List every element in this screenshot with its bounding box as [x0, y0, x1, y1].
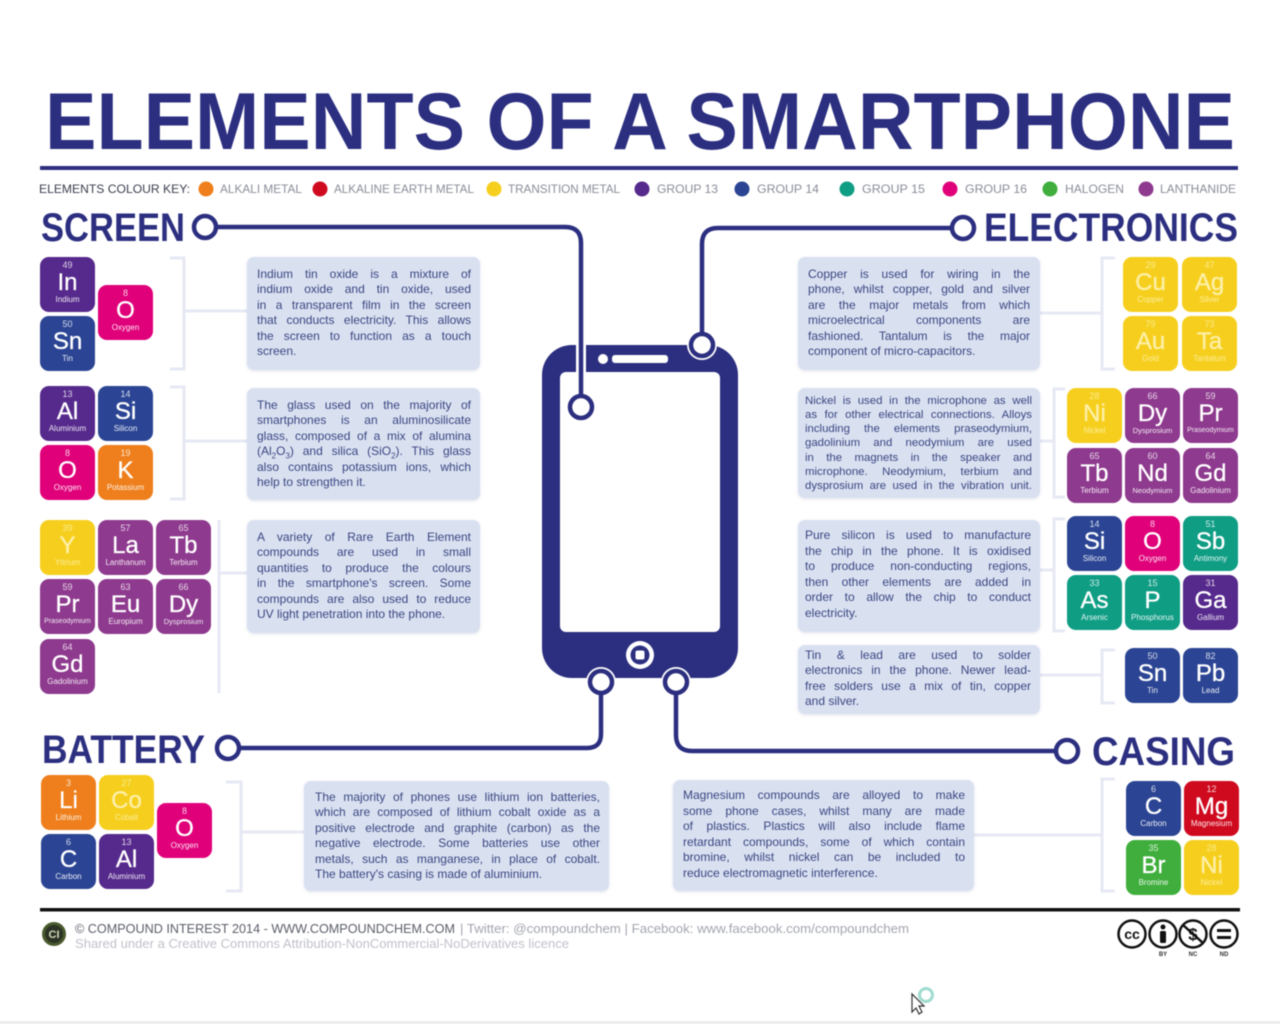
tiles: screen group 3: Gadolinium — [47, 677, 88, 686]
tiles: casing: Magnesium — [1191, 819, 1232, 828]
tiles: electronics group 1: Ag — [1195, 269, 1224, 296]
tiles: battery — [40, 774, 213, 890]
tiles: screen group 3: La — [112, 532, 139, 559]
tiles: electronics group 3: P — [1144, 587, 1160, 614]
tiles: screen group 1: 8 — [123, 288, 128, 298]
tiles: electronics group 3: O — [1143, 528, 1162, 555]
tiles: electronics group 1: Cu — [1135, 269, 1166, 296]
tiles: screen group 1: 50 — [62, 319, 72, 329]
tiles: electronics group 3: Sb — [1196, 528, 1225, 555]
text: tin and lead: Tin & lead are used to solder — [805, 648, 1031, 662]
text: silicon: order to allow the chip to conduct — [805, 590, 1031, 604]
text: casing: bromine, whilst nickel can be included to — [683, 850, 965, 864]
text: nickel: in the magnets in the speaker and — [805, 452, 1032, 464]
tiles: screen group 1: Oxygen — [112, 323, 139, 332]
footer credits: Shared under a Creative Commons Attribution-NonCommercial-NoDerivatives licence — [75, 937, 569, 951]
tiles: casing: 35 — [1148, 843, 1158, 853]
tiles: electronics group 4: 82 — [1205, 651, 1216, 661]
phone — [542, 345, 738, 678]
tiles: electronics group 4 — [1124, 647, 1239, 704]
colour key legend — [39, 182, 1236, 196]
creative commons icons: cc — [1124, 926, 1140, 942]
tiles: electronics group 3: Phosphorus — [1131, 613, 1174, 622]
tiles: casing: Carbon — [1140, 819, 1167, 828]
text: indium tin oxide — [247, 257, 480, 370]
heading: casing: CASING — [1092, 730, 1235, 774]
title: ELEMENTS OF A SMARTPHONE — [45, 77, 1235, 167]
text: glass: help to strengthen it. — [257, 475, 366, 489]
tiles: electronics group 3: Antimony — [1194, 554, 1227, 563]
text: copper: component of micro-capacitors. — [808, 344, 975, 358]
tiles: electronics group 4: Sn — [1138, 660, 1167, 687]
line and node: electronics — [687, 217, 974, 360]
tiles: battery: Co — [111, 787, 142, 814]
tiles: electronics group 2: Praseodymium — [1187, 427, 1234, 434]
tiles: battery: Oxygen — [171, 841, 198, 850]
tiles: screen group 2: Si — [115, 398, 136, 425]
tiles: electronics group 1: Gold — [1142, 354, 1159, 363]
tiles: casing: Mg — [1195, 793, 1228, 820]
tiles: screen group 2: K — [117, 457, 134, 484]
tiles: battery: Carbon — [55, 872, 82, 881]
text: nickel — [798, 388, 1040, 498]
tiles: screen group 2: Oxygen — [54, 483, 81, 492]
text: battery: metals, such as manganese, in place of cobalt. — [315, 852, 600, 866]
colour key legend: ALKALI METAL — [220, 182, 302, 196]
text: glass: also contains potassium ions, which — [257, 460, 471, 474]
colour key legend: ELEMENTS COLOUR KEY: — [39, 182, 190, 196]
tiles: electronics group 2: 64 — [1205, 451, 1216, 461]
tiles: screen group 3: 65 — [178, 523, 188, 533]
tiles: battery: 3 — [66, 778, 71, 788]
text: tin and lead: electronics in the phone. Newer lead- — [805, 663, 1031, 677]
tiles: electronics group 3: 15 — [1147, 578, 1158, 588]
tiles: screen group 1: In — [57, 269, 78, 296]
heading: screen: SCREEN — [41, 206, 185, 250]
tiles: screen group 3: Tb — [169, 532, 198, 559]
text: silicon: electricity. — [805, 606, 857, 620]
tiles: electronics group 3: Arsenic — [1081, 613, 1108, 622]
mouse cursor — [912, 988, 932, 1014]
tiles: screen group 3: 59 — [62, 582, 72, 592]
text: silicon: Pure silicon is used to manufacture — [805, 528, 1031, 542]
text: rare earth: A variety of Rare Earth Element — [257, 530, 471, 544]
tiles: screen group 3: Terbium — [169, 558, 198, 567]
heading: electronics: ELECTRONICS — [984, 206, 1238, 250]
text: casing: reduce electromagnetic interference. — [683, 866, 878, 880]
tiles: battery: Li — [59, 787, 78, 814]
text: rare earth: quantities to produce the colours — [257, 560, 471, 574]
tiles: electronics group 2: Dy — [1138, 400, 1167, 427]
tiles: electronics group 1: Tantalum — [1193, 354, 1226, 363]
tiles: electronics group 3: Ga — [1194, 587, 1226, 614]
creative commons icons: $ — [1188, 925, 1198, 944]
text: glass: smartphones is an aluminosilicate — [257, 413, 471, 427]
text: tin and lead — [798, 645, 1040, 714]
tiles: screen group 1 — [39, 256, 154, 372]
footer rule — [40, 908, 1240, 912]
colour key legend: HALOGEN — [1065, 182, 1124, 196]
text: copper: fashioned. Tantalum is the major — [808, 328, 1030, 342]
compound interest logo: CI — [48, 929, 60, 941]
tiles: screen group 3: 63 — [120, 582, 130, 592]
tiles: battery: Cobalt — [115, 813, 138, 822]
tiles: casing: C — [1145, 793, 1162, 820]
tiles: electronics group 2: Dysprosium — [1133, 426, 1172, 435]
text: battery: The majority of phones use lithium ion batteries, — [315, 790, 600, 804]
tiles: screen group 3 — [39, 519, 212, 695]
text: nickel: dysprosium are used in the vibration unit. — [805, 480, 1032, 492]
line and node: screen — [194, 216, 592, 418]
text: indium tin oxide: the screen to function as a touch — [257, 328, 471, 342]
tiles: electronics group 2: 60 — [1147, 451, 1158, 461]
tiles: battery: 13 — [121, 837, 132, 847]
text: indium tin oxide: in a transparent film in the screen — [257, 298, 471, 312]
connector brackets — [170, 258, 1115, 891]
creative commons icons: BY — [1159, 952, 1167, 958]
tiles: screen group 3: Praseodymium — [44, 618, 91, 625]
tiles: electronics group 2: 66 — [1147, 391, 1158, 401]
tiles: screen group 2: 8 — [65, 448, 70, 458]
text: silicon — [798, 520, 1040, 632]
text: rare earth: compounds are used in small — [257, 545, 471, 559]
colour key legend: GROUP 13 — [657, 182, 718, 196]
tiles: screen group 2: Potassium — [107, 483, 144, 492]
tiles: screen group 3: 64 — [62, 642, 72, 652]
tiles: battery: Lithium — [56, 813, 81, 822]
colour key legend: GROUP 15 — [862, 182, 925, 196]
tiles: casing: Ni — [1200, 852, 1223, 879]
tiles: battery: 6 — [66, 837, 71, 847]
text: copper: are the major metals from which — [808, 298, 1030, 312]
text: nickel: gadolinium and neodymium are used — [805, 437, 1032, 449]
tiles: electronics group 2: Terbium — [1080, 486, 1109, 495]
tiles: casing: Nickel — [1201, 878, 1222, 887]
footer credits: © COMPOUND INTEREST 2014 - WWW.COMPOUNDCHEM.COM — [75, 922, 455, 936]
tiles: electronics group 3: Gallium — [1197, 613, 1224, 622]
tiles: screen group 3: Dysprosium — [164, 617, 203, 626]
tiles: screen group 3: Europium — [108, 617, 143, 626]
text: casing: some phone cases, whilst many are made — [683, 804, 965, 818]
text: casing: retardant compounds, some of which contain — [683, 834, 965, 848]
tiles: electronics group 2: Tb — [1080, 460, 1108, 487]
text: nickel: Nickel is used in the microphone as well — [805, 394, 1032, 406]
text: copper: phone, whilst copper, gold and silver — [808, 282, 1030, 296]
tiles: casing: 28 — [1206, 843, 1216, 853]
heading: battery: BATTERY — [42, 728, 205, 772]
colour key legend: TRANSITION METAL — [508, 182, 620, 196]
tiles: electronics group 4: 50 — [1147, 651, 1158, 661]
tiles: screen group 3: Yttrium — [55, 558, 80, 567]
text: glass: glass, composed of a mix of alumina — [257, 428, 471, 442]
text: rare earth: UV light penetration into the phone. — [257, 607, 445, 621]
creative commons icons: NC — [1189, 952, 1198, 958]
tiles: screen group 3: 57 — [120, 523, 130, 533]
tiles: electronics group 1: 73 — [1204, 319, 1214, 329]
tiles: screen group 3: Eu — [111, 591, 140, 618]
bottom edge strip — [0, 1021, 1280, 1024]
tiles: casing: 12 — [1206, 784, 1216, 794]
text: casing: of plastics. Plastics will also include flame — [683, 819, 965, 833]
text: battery — [304, 781, 609, 891]
tiles: screen group 2 — [39, 385, 154, 501]
tiles: electronics group 3: 51 — [1205, 519, 1216, 529]
line and node: battery — [217, 667, 616, 759]
text: casing — [673, 780, 974, 891]
tiles: electronics group 1: 47 — [1204, 260, 1214, 270]
colour key legend: GROUP 14 — [757, 182, 819, 196]
tiles: battery: 8 — [182, 806, 187, 816]
tiles: electronics group 4: Tin — [1147, 686, 1158, 695]
tiles: screen group 2: Silicon — [114, 424, 137, 433]
tiles: electronics group 2: Pr — [1198, 400, 1222, 427]
tiles: electronics group 1: Silver — [1199, 295, 1220, 304]
tiles: screen group 1: Tin — [62, 354, 73, 363]
text: indium tin oxide: Indium tin oxide is a mixture of — [257, 266, 471, 280]
text: battery: negative electrode. Some batteries use other — [315, 836, 600, 850]
text: indium tin oxide: that conducts electricity. This allows — [257, 313, 471, 327]
tiles: electronics group 2: Neodymium — [1132, 486, 1172, 495]
tiles: screen group 3: Pr — [56, 591, 80, 618]
tiles: casing: Br — [1142, 852, 1166, 879]
compound interest logo — [42, 922, 66, 946]
tiles: electronics group 1 — [1122, 256, 1238, 372]
footer credits: | Twitter: @compoundchem | Facebook: www.facebook.com/compoundchem — [460, 922, 909, 936]
text: battery: which are composed of lithium cobalt oxide as a — [315, 805, 600, 819]
tiles: screen group 1: Indium — [55, 295, 80, 304]
tiles: electronics group 3: Oxygen — [1139, 554, 1166, 563]
tiles: screen group 1: 49 — [62, 260, 72, 270]
tiles: electronics group 2: 28 — [1089, 391, 1100, 401]
text: casing: Magnesium compounds are alloyed to make — [683, 788, 965, 802]
tiles: screen group 3: 39 — [62, 523, 72, 533]
tiles: electronics group 2: Nickel — [1084, 426, 1105, 435]
tiles: battery: C — [60, 846, 77, 873]
tiles: screen group 3: Lanthanum — [105, 558, 146, 567]
tiles: screen group 2: 14 — [120, 389, 130, 399]
text: battery: positive electrode and graphite (carbon) as the — [315, 820, 600, 834]
tiles: electronics group 1: 79 — [1145, 319, 1156, 329]
text: nickel: as for other electrical connections. Alloys — [805, 409, 1032, 421]
tiles: electronics group 2: Gd — [1194, 460, 1226, 487]
tiles: screen group 2: Aluminium — [49, 424, 86, 433]
tiles: screen group 3: Dy — [169, 591, 198, 618]
text: glass — [247, 388, 480, 500]
text: rare earth: compounds are also used to reduce — [257, 592, 471, 606]
text: silicon: to produce non-conducting regions, — [805, 559, 1031, 573]
text: glass: The glass used on the majority of — [257, 398, 471, 412]
tiles: electronics group 2: Nd — [1137, 460, 1168, 487]
text: tin and lead: and silver. — [805, 694, 859, 708]
tiles: electronics group 3: Si — [1084, 528, 1105, 555]
text: indium tin oxide: screen. — [257, 344, 296, 358]
tiles: screen group 1: O — [116, 297, 135, 324]
tiles: electronics group 1: Copper — [1137, 295, 1164, 304]
text: rare earth: in the smartphone's screen. Some — [257, 576, 471, 590]
tiles: screen group 3: 66 — [178, 582, 188, 592]
text: glass: (Al2O3) and silica (SiO2). This glass — [257, 444, 471, 460]
tiles: electronics group 2: Ni — [1083, 400, 1106, 427]
footer credits — [75, 922, 909, 951]
tiles: electronics group 1: Au — [1136, 328, 1165, 355]
tiles: casing: Bromine — [1139, 878, 1168, 887]
tiles: electronics group 1: Ta — [1197, 328, 1222, 355]
tiles: screen group 3: Gd — [51, 651, 84, 678]
creative commons icons — [1118, 920, 1238, 958]
tiles: electronics group 3: 31 — [1205, 578, 1216, 588]
tiles: electronics group 2: 65 — [1089, 451, 1100, 461]
tiles: casing: 6 — [1151, 784, 1156, 794]
text: nickel: microphone. Neodymium, terbium and — [805, 466, 1032, 478]
tiles: electronics group 2: Gadolinium — [1190, 486, 1231, 495]
text: indium tin oxide: indium oxide and tin oxide, used — [257, 282, 471, 296]
tiles: electronics group 3: 33 — [1089, 578, 1100, 588]
tiles: screen group 1: Sn — [53, 328, 82, 355]
tiles: electronics group 2 — [1066, 387, 1239, 504]
tiles: electronics group 2: 59 — [1205, 391, 1216, 401]
tiles: screen group 3: Y — [59, 532, 76, 559]
text: copper: Copper is used for wiring in the — [808, 266, 1030, 280]
tiles: screen group 2: 13 — [62, 389, 72, 399]
text: silicon: the chip in the phone. It is oxidised — [805, 544, 1031, 558]
line and node: casing — [661, 667, 1078, 762]
tiles: battery: Aluminium — [108, 872, 145, 881]
creative commons icons: ND — [1220, 952, 1229, 958]
text: rare earth — [247, 520, 480, 633]
tiles: screen group 2: 19 — [120, 448, 130, 458]
tiles: electronics group 1: 29 — [1145, 260, 1156, 270]
tiles: electronics group 3 — [1066, 515, 1239, 631]
text: tin and lead: free solders use a mix of tin, copper — [805, 678, 1031, 692]
text: nickel: including the elements praseodymium, — [805, 423, 1032, 435]
tiles: screen group 2: Al — [57, 398, 78, 425]
tiles: screen group 2: O — [58, 457, 77, 484]
tiles: electronics group 3: Silicon — [1083, 554, 1106, 563]
tiles: battery: O — [175, 815, 194, 842]
tiles: electronics group 3: 14 — [1089, 519, 1100, 529]
text: copper — [798, 257, 1040, 370]
tiles: electronics group 4: Pb — [1196, 660, 1225, 687]
text: battery: The battery's casing is made of aluminium. — [315, 867, 542, 881]
tiles: battery: Al — [116, 846, 137, 873]
colour key legend: LANTHANIDE — [1160, 182, 1236, 196]
text: silicon: then other elements are added in — [805, 574, 1031, 588]
tiles: electronics group 3: As — [1080, 587, 1108, 614]
colour key legend: GROUP 16 — [965, 182, 1027, 196]
tiles: battery: 27 — [121, 778, 132, 788]
text: copper: microelectrical components are — [808, 313, 1030, 327]
tiles: electronics group 4: Lead — [1202, 686, 1219, 695]
tiles: electronics group 3: 8 — [1150, 519, 1155, 529]
tiles: casing — [1125, 780, 1240, 896]
colour key legend: ALKALINE EARTH METAL — [334, 182, 474, 196]
